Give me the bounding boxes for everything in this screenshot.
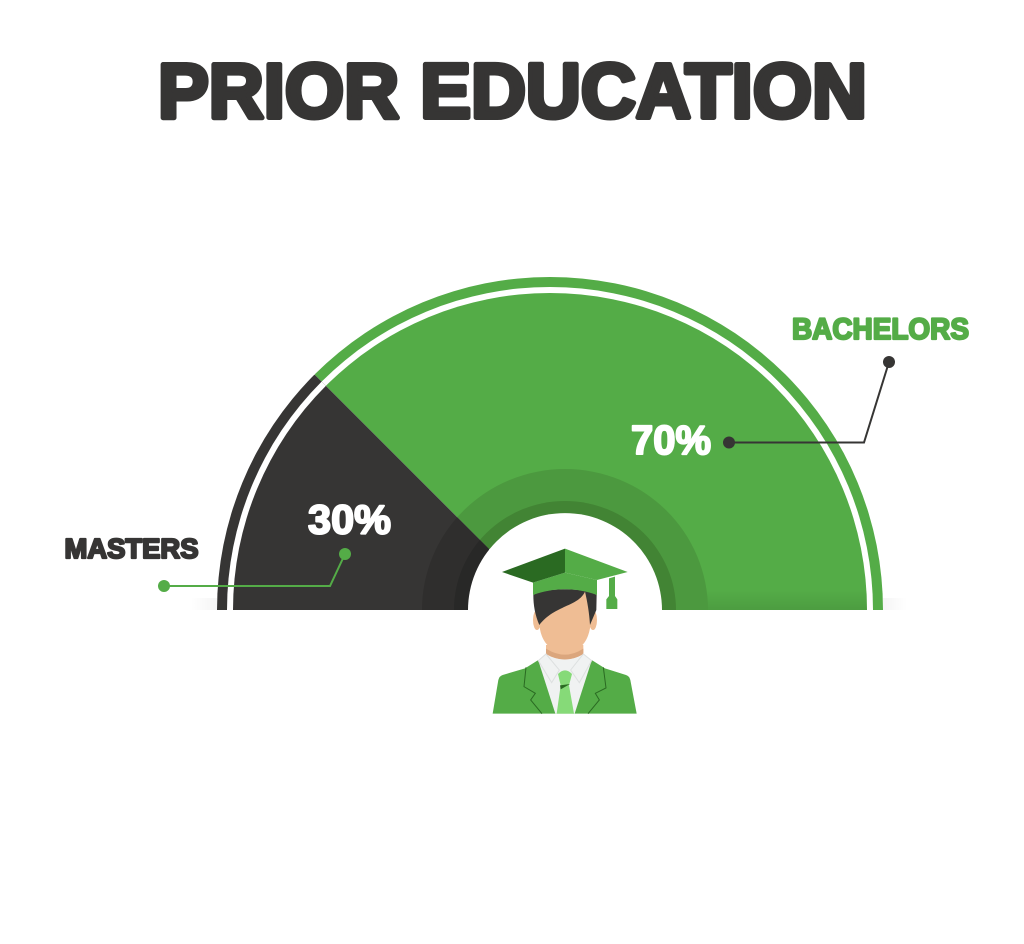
label: 30%: 30% (308, 496, 391, 542)
label: 70%: 70% (631, 417, 711, 463)
icon: graduate (493, 549, 637, 714)
neck (546, 645, 583, 659)
hair (533, 589, 597, 625)
segment: masters 30% (217, 374, 489, 610)
tie (557, 670, 574, 714)
segment: bachelors 70% (315, 277, 883, 610)
label: bachelors: BACHELORS (792, 313, 969, 346)
leader line: masters (158, 548, 351, 592)
jacket (493, 660, 637, 714)
shirt (538, 654, 592, 714)
semicircle chart (212, 277, 887, 610)
title: PRIOR EDUCATION (158, 48, 867, 134)
base shadow (190, 598, 907, 610)
collar (538, 654, 592, 683)
inner cut-out (468, 513, 662, 610)
leader line: bachelors (723, 356, 895, 448)
cap (502, 549, 628, 609)
ears (533, 610, 541, 630)
label: masters: MASTERS (64, 533, 198, 564)
lapels (524, 667, 606, 714)
face (539, 591, 591, 653)
